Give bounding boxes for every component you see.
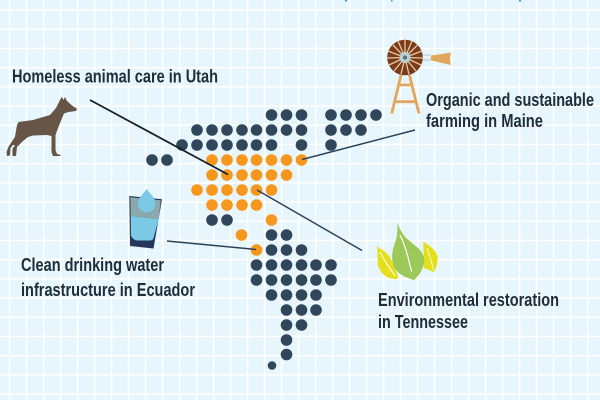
dot map: orange funded dots bbox=[191, 154, 307, 256]
leader line: Tennessee bbox=[257, 190, 362, 250]
leader line: Maine bbox=[302, 130, 415, 160]
label: Utah: Homeless animal care in Utah bbox=[12, 66, 218, 86]
label: Maine bbox=[426, 89, 594, 131]
icon: dog bbox=[6, 97, 77, 156]
label: Ecuador bbox=[21, 254, 195, 300]
icon: windmill bbox=[387, 40, 451, 114]
label: Maine: farming in Maine bbox=[426, 110, 543, 131]
label: Ecuador: Clean drinking water bbox=[21, 254, 164, 275]
icon: leaves bbox=[377, 222, 438, 280]
dot map: dark dots bbox=[146, 109, 382, 370]
leader line: Utah bbox=[90, 100, 228, 174]
leader line: Ecuador bbox=[167, 241, 256, 250]
label: Tennessee bbox=[378, 289, 559, 332]
label: Ecuador: infrastructure in Ecuador bbox=[21, 279, 195, 300]
label: Tennessee: in Tennessee bbox=[378, 311, 468, 332]
icon: glass of water bbox=[129, 188, 162, 248]
